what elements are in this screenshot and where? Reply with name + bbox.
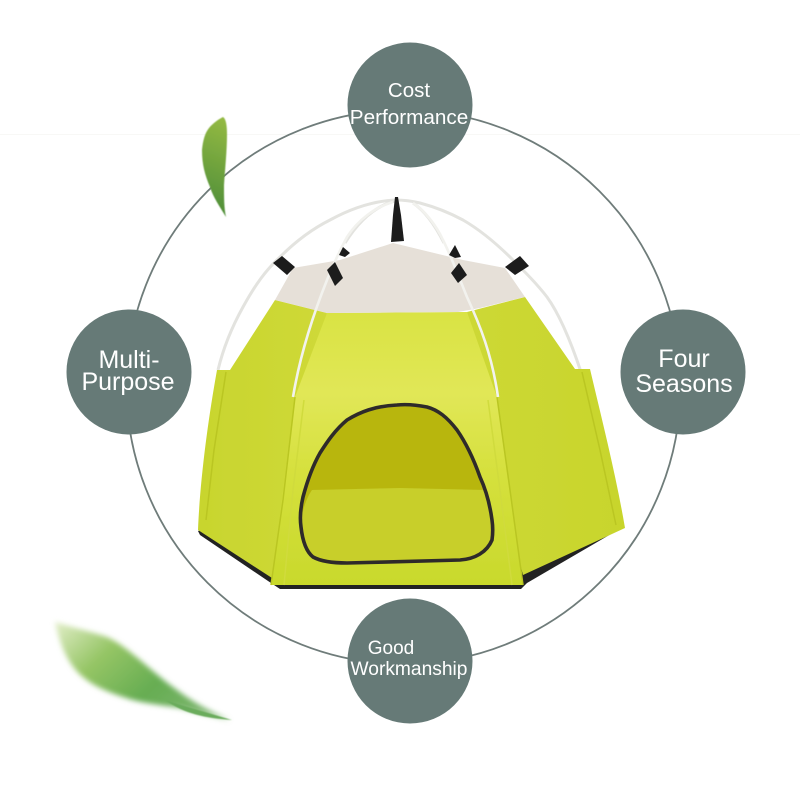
tent seams [206,372,616,585]
badge: Multi-Purpose [66,310,192,434]
tent door interior wall [300,405,493,563]
tent left panel [198,300,327,578]
tent floor mat [301,488,492,563]
icon: small green leaf [202,117,227,217]
tent door zipper outline [300,405,493,563]
badge: Good Workmanship [348,598,472,724]
tent outer poles [218,200,581,372]
badge: Multi-Purpose: Purpose [81,368,175,396]
tent base edge [198,500,611,589]
badge: Cost Performance [348,42,472,168]
icon: blurred green leaf [55,622,232,720]
badge: Cost Performance: Performance [350,106,468,129]
tent front panel [271,312,523,585]
tent front poles [293,202,498,397]
faint horizontal band line [0,134,800,135]
ring connecting the four features [126,110,680,664]
tent back poles [345,201,444,243]
black strap tabs [273,197,529,286]
badge: Multi-Purpose: Multi- [98,346,160,374]
badge: Four Seasons [620,310,746,434]
badge: Good Workmanship: Workmanship [351,659,467,680]
badge: Cost Performance: Cost [388,79,430,102]
badge: Four Seasons: Four [658,345,710,373]
tent illustration [198,197,625,589]
tent beige top [275,243,525,313]
tent right panel [467,297,625,575]
badge: Good Workmanship: Good [368,638,414,659]
badge: Four Seasons: Seasons [635,370,733,398]
